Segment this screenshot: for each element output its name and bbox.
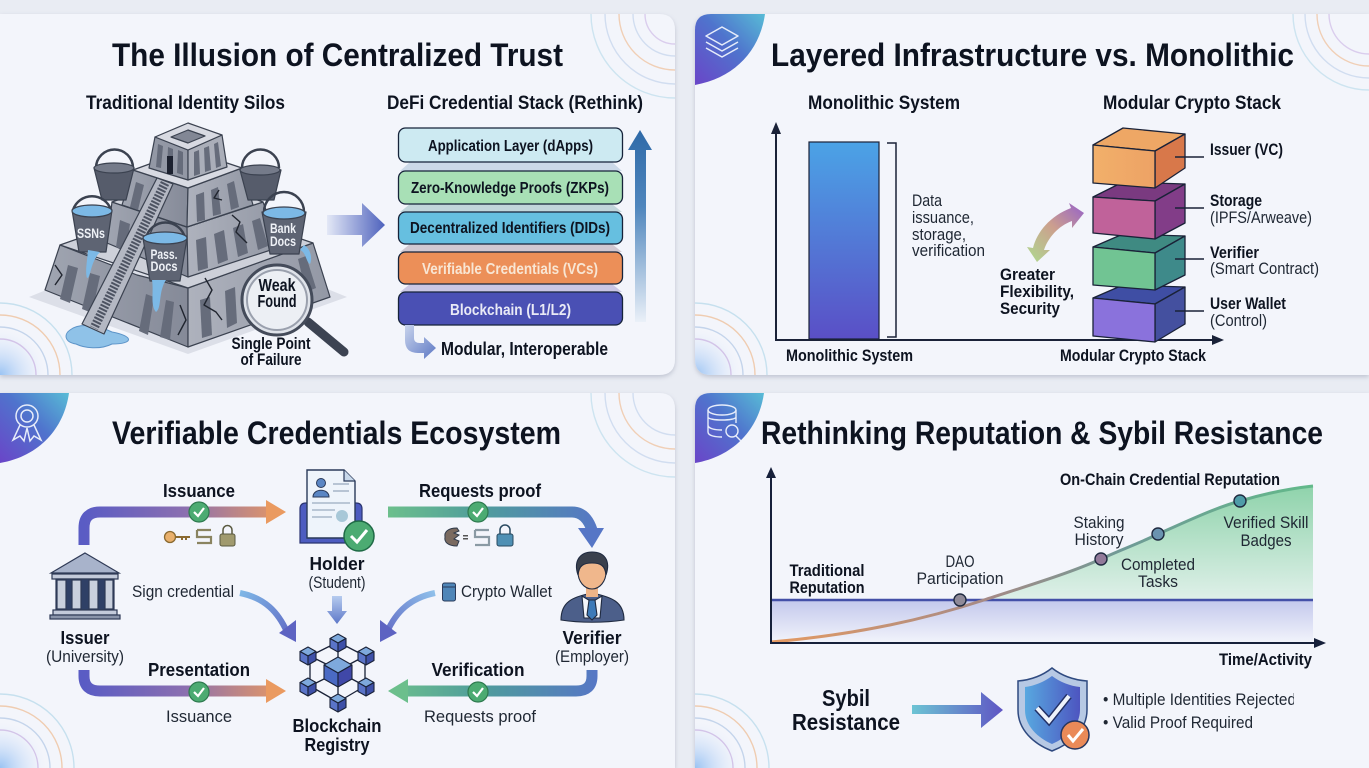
icon: shield with check <box>1018 668 1089 751</box>
axis label: Monolithic System: Monolithic System <box>786 347 913 365</box>
label: Staking History: Staking <box>1074 514 1124 532</box>
cube: storage <box>1093 182 1185 239</box>
label: Traditional Reputation: Reputation <box>790 579 864 597</box>
chart areas <box>771 486 1313 642</box>
text: data issuance, storage, verification: verification <box>912 242 985 260</box>
label: User Wallet: User Wallet <box>1210 295 1286 313</box>
flow: verification <box>388 670 592 703</box>
layer: DIDs <box>398 212 622 244</box>
label: User Wallet: (Control) <box>1210 312 1267 330</box>
title: Layered Infrastructure vs. Monolithic <box>771 37 1294 73</box>
text: data issuance, storage, verification: Data <box>912 192 943 210</box>
arrow: sign credential to registry <box>240 593 296 642</box>
tier 1 <box>149 123 227 180</box>
chart axes <box>771 122 1224 345</box>
text: Greater Flexibility, Security: Flexibility, <box>1000 282 1074 301</box>
data points <box>954 495 1246 606</box>
bucket: Bank Docs <box>262 192 311 264</box>
magnifying glass: Weak Found: Weak <box>258 275 296 295</box>
arrow: holder to registry <box>327 596 347 624</box>
icon: holder credential document <box>300 470 374 551</box>
line: on-chain reputation <box>771 486 1313 642</box>
icon: ribbon award <box>13 405 41 441</box>
panel: Layered Infrastructure vs. Monolithic <box>695 14 1369 375</box>
ladder <box>82 178 173 334</box>
bucket: Pass. Docs: Docs <box>150 258 178 274</box>
layer stack <box>398 128 622 325</box>
bullet: Multiple Identities Rejected: • Multiple Identities Rejected <box>1103 691 1296 709</box>
heading: DeFi Credential Stack: DeFi Credential Stack (Rethink) <box>387 92 643 114</box>
modular cube stack <box>1093 128 1185 342</box>
heading: Modular Crypto Stack: Modular Crypto Stack <box>1103 92 1281 114</box>
layer: Application: Application Layer (dApps) <box>428 138 593 155</box>
arrow: double curved <box>1027 203 1084 262</box>
bucket: Pass. Docs: Pass. <box>150 246 178 262</box>
axis label: Modular Crypto Stack: Modular Crypto Stack <box>1060 347 1207 365</box>
layer: Blockchain: Blockchain (L1/L2) <box>450 302 571 319</box>
arrow: modular <box>405 325 436 359</box>
illustration: cracked ziggurat of identity silos <box>29 123 347 354</box>
label: Completed Tasks: Tasks <box>1138 573 1178 591</box>
bar: monolithic <box>809 142 879 339</box>
arrow: wallet to registry <box>380 593 435 642</box>
text: Greater Flexibility, Security: Security <box>1000 299 1060 318</box>
label: Verifier: (Employer) <box>555 648 629 666</box>
cube: issuer <box>1093 128 1185 188</box>
label: Issuer: Issuer <box>60 628 110 648</box>
icons: key, document, lock <box>164 526 235 546</box>
bucket: back left <box>94 150 134 200</box>
label: Sybil Resistance: Resistance <box>792 709 900 735</box>
arrow: sybil to shield <box>912 692 1003 728</box>
layer: VCs: Verifiable Credentials (VCs) <box>422 261 598 278</box>
puddle <box>66 326 128 348</box>
line: traditional reputation <box>771 599 1313 601</box>
flow: issuance <box>84 500 286 545</box>
layer: VCs <box>398 252 622 284</box>
label: Verified Skill Badges: Badges <box>1240 532 1292 550</box>
tier 4 <box>45 200 330 347</box>
label: Issuance: Issuance <box>163 481 235 501</box>
bucket: SSNs <box>72 196 112 278</box>
ribs tier 3 <box>116 218 268 271</box>
magnifying glass: Weak Found <box>242 265 344 352</box>
label: Sign credential: Sign credential <box>132 583 234 601</box>
title: The Illusion of Centralized Trust <box>112 37 563 73</box>
bucket: Bank Docs: Bank <box>270 220 296 236</box>
panel: The Illusion of Centralized Trust <box>0 14 675 375</box>
tier 3 <box>107 175 280 277</box>
label: Issuer (VC): Issuer (VC) <box>1210 141 1283 159</box>
label: Holder: Holder <box>310 554 364 574</box>
layer: Application <box>398 128 622 162</box>
label: Single Point of Failure: of Failure <box>240 351 302 369</box>
label: Sybil Resistance: Sybil <box>822 685 870 711</box>
arrow: up <box>628 130 652 322</box>
panel: Verifiable Credentials Ecosystem <box>0 393 675 768</box>
label: Requests proof lower: Requests proof <box>424 708 536 726</box>
bullet: Valid Proof Required: • Valid Proof Required <box>1103 714 1253 732</box>
label: Completed Tasks: Completed <box>1121 556 1195 574</box>
label: Blockchain Registry: Registry <box>304 735 370 755</box>
heading: Traditional Identity Silos: Traditional Identity Silos <box>86 92 285 114</box>
bullet list <box>1103 691 1296 732</box>
bucket: SSNs: SSNs <box>77 225 105 241</box>
icon: university building <box>50 553 120 619</box>
layer: DIDs: Decentralized Identifiers (DIDs) <box>410 220 610 237</box>
label: Holder: (Student) <box>308 574 366 592</box>
icon: crypto wallet <box>442 583 456 601</box>
flow: requests proof <box>388 502 604 548</box>
label: Verification: Verification <box>432 660 524 680</box>
label: Verified Skill Badges: Verified Skill <box>1224 514 1308 532</box>
icon: database search <box>708 405 741 441</box>
label: Blockchain Registry: Blockchain <box>292 716 382 736</box>
label: Modular, Interoperable: Modular, Interoperable <box>441 338 608 359</box>
cube: user wallet <box>1093 285 1185 342</box>
label: Storage: Storage <box>1210 192 1262 210</box>
reputation chart <box>766 467 1326 648</box>
magnifying glass: Weak Found: Found <box>258 291 296 311</box>
label: Verifier: (Smart Contract) <box>1210 260 1319 278</box>
icon: layers <box>706 27 738 57</box>
bracket <box>887 143 896 337</box>
layer: Blockchain <box>398 292 622 325</box>
bucket: back right <box>240 150 281 200</box>
label: Staking History: History <box>1074 531 1124 549</box>
label: On-Chain Credential Reputation: On-Chain Credential Reputation <box>1060 471 1280 489</box>
bucket: Bank Docs: Docs <box>270 233 296 249</box>
label: Issuer: (University) <box>46 648 124 666</box>
label: Time/Activity: Time/Activity <box>1219 651 1313 669</box>
label: Presentation: Presentation <box>148 660 250 680</box>
label: DAO Participation: Participation <box>916 570 1004 588</box>
panel: Rethinking Reputation & Sybil Resistance <box>695 393 1369 768</box>
label: Traditional Reputation: Traditional <box>790 562 864 580</box>
flow: presentation <box>84 670 286 703</box>
bucket: Pass. Docs <box>143 222 187 312</box>
icon: verifier person <box>561 552 624 622</box>
title: Verifiable Credentials Ecosystem <box>112 415 561 451</box>
text: data issuance, storage, verification: storage, <box>912 226 966 244</box>
ribs tier 2 <box>130 181 239 222</box>
ribs tier 4 <box>60 256 316 340</box>
icons: zk proof glyphs <box>445 525 513 546</box>
label: Single Point of Failure: Single Point <box>232 335 311 353</box>
label: Issuance lower: Issuance <box>166 708 232 726</box>
cube: verifier <box>1093 234 1185 290</box>
layer: ZKPs: Zero-Knowledge Proofs (ZKPs) <box>411 180 609 197</box>
label: Crypto Wallet: Crypto Wallet <box>461 583 552 601</box>
text: Greater Flexibility, Security: Greater <box>1000 265 1055 284</box>
layer: ZKPs <box>398 171 622 204</box>
heading: Monolithic System: Monolithic System <box>808 92 960 114</box>
cracks <box>55 190 247 335</box>
label: DAO Participation: DAO <box>946 553 975 571</box>
label: Verifier: Verifier <box>1210 244 1259 262</box>
arrow: silos to stack <box>327 203 385 247</box>
leader lines <box>1175 157 1204 311</box>
text: data issuance, storage, verification: issuance, <box>912 209 974 227</box>
label: Verifier: Verifier <box>562 628 622 648</box>
icon: blockchain registry <box>300 634 374 712</box>
ribs tier 1 <box>156 142 221 176</box>
label: Storage: (IPFS/Arweave) <box>1210 209 1312 227</box>
label: Requests proof: Requests proof <box>419 481 542 501</box>
tier 2 <box>122 150 253 227</box>
axes <box>766 467 1326 648</box>
